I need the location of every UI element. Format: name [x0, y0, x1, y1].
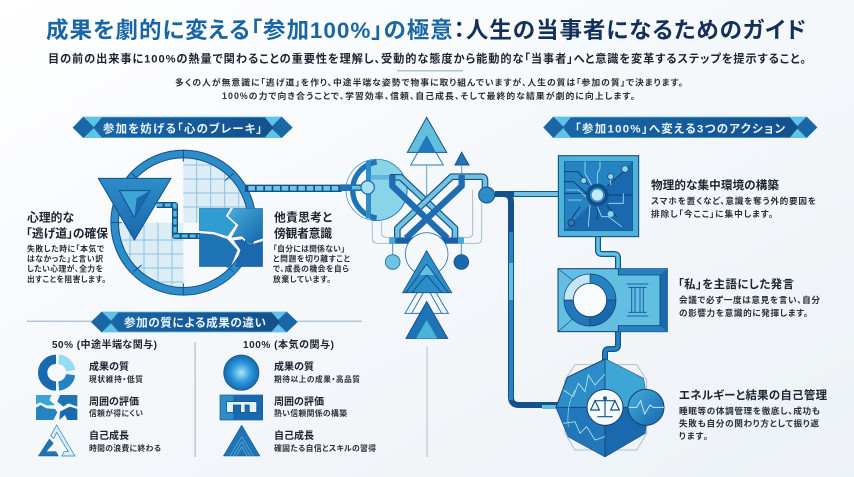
- panel: 50 percent column: 50% (中途半端な関与): [52, 338, 157, 351]
- top triangles: [407, 117, 469, 165]
- lower circle: [405, 233, 448, 275]
- icon: sphere: [224, 355, 259, 390]
- action 3 text: エネルギーと結果の自己管理: [679, 388, 828, 402]
- action 3 text: ります。: [679, 431, 708, 441]
- action 2 text: [678, 277, 820, 318]
- banner: quality comparison: 参加の質による成果の違い: [124, 316, 266, 330]
- banner: three actions: [543, 117, 817, 138]
- illustration: broken wheel with triangle: [98, 150, 342, 295]
- panel: 100 percent column: 確固たる自信とスキルの習得: [274, 443, 376, 453]
- cracked square: [199, 208, 263, 267]
- icon: interlocked blocks: [220, 395, 263, 420]
- panel: 50 percent column: 自己成長: [89, 429, 129, 442]
- panel: 50 percent column: 周囲の評価: [89, 395, 139, 408]
- icon: split ring: [43, 359, 71, 386]
- action 2 text: 「私」を主語にした発言: [678, 277, 794, 291]
- crossing pipes: [389, 175, 485, 241]
- action 2 text: の影響力を意識的に発揮します。: [679, 307, 808, 318]
- text: blame and bystander: 傍観者意識: [274, 226, 332, 240]
- central diagram: crossing pipes and triangles: [340, 117, 495, 338]
- inner pipe: [157, 205, 200, 236]
- action 3 text: 睡眠等の体調管理を徹底し、成功も: [679, 405, 820, 416]
- action 1 text: スマホを置くなど、意識を奪う外的要因を: [651, 195, 816, 206]
- banner: mental brakes: 参加を妨げる「心のブレーキ」: [103, 122, 262, 136]
- intro paragraph: [175, 70, 683, 101]
- text: escape route: したい心理が、全力を: [27, 264, 103, 274]
- text: escape route: [26, 210, 108, 284]
- text: escape route: 心理的な: [27, 210, 74, 224]
- text: blame and bystander: 「自分には関係ない」: [273, 244, 345, 254]
- panel: 50 percent column: 時間の浪費に終わる: [89, 443, 161, 453]
- icon: broken triangle: [38, 425, 75, 456]
- scales glyph: [591, 397, 619, 417]
- text: blame and bystander: [273, 210, 350, 284]
- thin guide lines: [372, 190, 482, 243]
- wheel: [346, 159, 407, 221]
- text: blame and bystander: 放棄しています。: [273, 274, 331, 284]
- action 3 text: 失敗も自分の関わり方として振り返: [679, 418, 819, 428]
- text: blame and bystander: と問題を切り離すこと: [273, 254, 350, 264]
- action 3 text: [679, 388, 828, 441]
- panel: 100 percent column: 周囲の評価: [274, 395, 324, 408]
- panel: 100 percent column: 熱い信頼関係の構築: [274, 408, 347, 418]
- subtitle: 目の前の出来事に100%の熱量で関わることの重要性を理解し、受動的な態度から能動的な「当事者」へと意識を変革するステップを提示すること。: [48, 52, 806, 66]
- text: escape route: はなかった」と言い訳: [27, 254, 103, 264]
- panel: 50 percent column: 信頼が得にくい: [89, 408, 143, 418]
- action 3: octagon with scales: [556, 359, 664, 457]
- banner: quality comparison: [27, 312, 362, 332]
- lower triangles: [405, 277, 448, 313]
- banner: three actions: 「参加100%」へ変える3つのアクション: [575, 122, 785, 136]
- text: blame and bystander: で、成長の機会を自ら: [273, 264, 349, 274]
- junction node: [479, 187, 495, 203]
- grid quadrants: [119, 158, 246, 287]
- text: escape route: 出すことを阻害します。: [27, 274, 106, 284]
- panel: 50 percent column: 現状維持・低質: [89, 374, 143, 384]
- panel: 100 percent column: 成果の質: [274, 360, 314, 373]
- action 1 text: 物理的な集中環境の構築: [651, 178, 779, 192]
- triangle: [98, 178, 171, 240]
- text: escape route: 「逃げ道」の確保: [26, 226, 108, 240]
- panel: 100 percent column: 自己成長: [274, 429, 314, 442]
- banner: mental brakes: [73, 117, 293, 138]
- text: escape route: 失敗した時に「本気で: [27, 244, 105, 254]
- action 1 text: [651, 178, 816, 219]
- panel: 100 percent column: 期待以上の成果・高品質: [274, 374, 360, 384]
- panel: 50 percent column: 成果の質: [89, 360, 129, 373]
- outer ring: [115, 154, 252, 291]
- action 2: ring and pillar card: [558, 269, 667, 332]
- text: blame and bystander: 他責思考と: [274, 210, 332, 224]
- title: 成果を劇的に変える「参加100%」の極意：人生の当事者になるためのガイド: [46, 18, 806, 43]
- panel: 50 percent column: [36, 338, 161, 456]
- panel: 100 percent column: [220, 338, 376, 456]
- intro paragraph: 多くの人が無意識に「逃げ道」を作り、中途半端な姿勢で物事に取り組んでいますが、人生の質は「参加の質」で決まります。: [175, 76, 683, 88]
- action 1: circuit icon: [558, 156, 639, 237]
- central divider: [426, 347, 428, 457]
- intro paragraph: 100%の力で向き合うことで、学習効率、信頼、自己成長、そして最終的な結果が劇的に向上します。: [222, 90, 635, 101]
- connector pipes: [495, 194, 618, 407]
- action 1 text: 排除し「今ここ」に集中します。: [651, 208, 773, 219]
- icon: broken squares: [36, 395, 77, 420]
- column divider: [194, 342, 196, 457]
- action 2 text: 会議で必ず一度は意見を言い、自分: [679, 294, 820, 305]
- pipe to center: [245, 185, 342, 192]
- panel: 100 percent column: 100% (本気の関与): [243, 338, 334, 351]
- icon: solid triangle: [223, 425, 260, 456]
